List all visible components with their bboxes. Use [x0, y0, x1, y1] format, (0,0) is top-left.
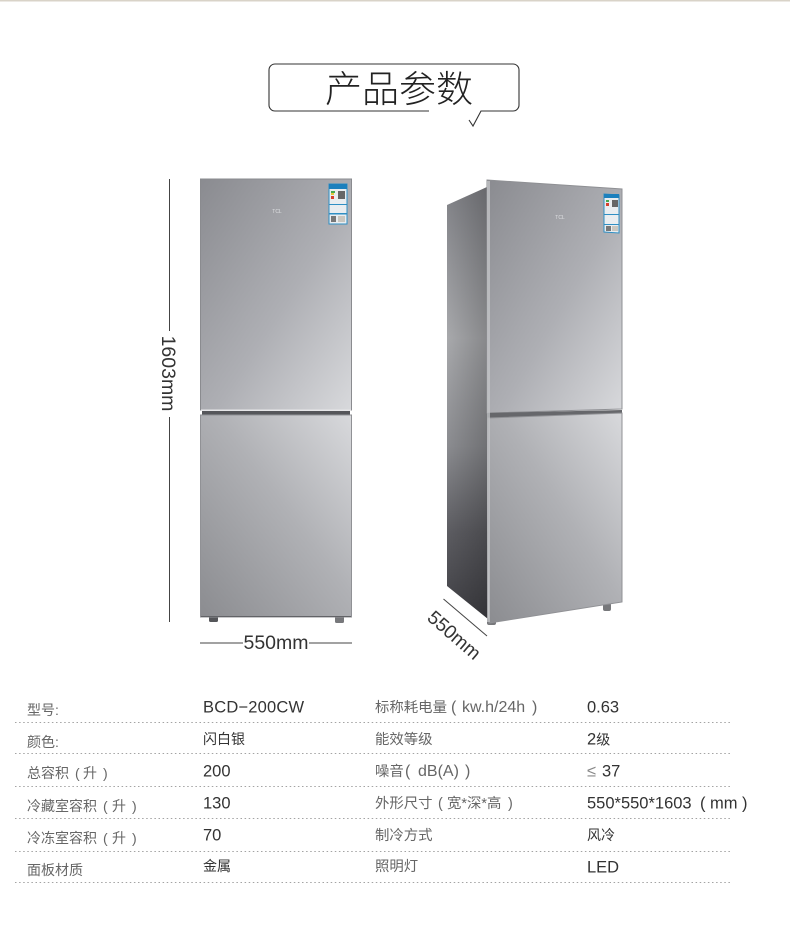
row: fridge volume: 冷藏室容积	[27, 798, 97, 814]
row: fridge volume: mm	[710, 794, 738, 812]
row: model	[27, 698, 619, 718]
row: fridge volume: (	[438, 796, 443, 812]
row: fridge volume: )	[508, 796, 513, 812]
row: total volume: 噪音	[375, 764, 404, 780]
row: total volume: 37	[602, 762, 620, 780]
feet	[209, 616, 218, 622]
row: fridge volume: 升	[112, 798, 126, 814]
lower door	[200, 415, 352, 617]
row: panel material: 面板材质	[27, 862, 83, 878]
row: fridge volume: 宽*深*高	[447, 795, 501, 812]
row: total volume: )	[103, 765, 108, 781]
row: panel material	[27, 858, 619, 878]
row: total volume: ≤	[587, 762, 596, 780]
row: total volume: (	[405, 763, 411, 780]
row: fridge volume: )	[742, 794, 748, 812]
row: freezer volume: (	[103, 830, 108, 846]
title text: 产品参数	[325, 69, 473, 110]
TCL logo: TCL	[272, 209, 282, 215]
lower door	[488, 413, 622, 623]
divider	[487, 410, 622, 419]
row: total volume: 200	[203, 762, 231, 780]
row: fridge volume: (	[700, 794, 706, 812]
row: fridge volume: (	[103, 798, 108, 814]
height dimension: 1603mm: 1603mm	[157, 336, 179, 411]
row: panel material: 照明灯	[375, 858, 418, 875]
row: model: 型号:	[27, 702, 59, 718]
row: freezer volume: 升	[112, 830, 126, 846]
row: model: kw.h/24h	[462, 699, 525, 716]
side panel	[447, 187, 488, 619]
row: panel material: LED	[587, 858, 619, 876]
feet	[487, 618, 496, 625]
TCL logo: TCL	[555, 215, 565, 221]
specification table	[15, 698, 748, 882]
energy label	[329, 184, 347, 224]
title callout	[269, 64, 519, 126]
row: fridge volume: 130	[203, 794, 231, 812]
row: model: 标称耗电量	[375, 700, 447, 716]
row: model: (	[451, 699, 457, 716]
door edge	[487, 181, 490, 622]
row: total volume: )	[465, 763, 470, 780]
upper door	[487, 180, 622, 413]
row: colour: 颜色:	[27, 734, 59, 750]
row: panel material: 金属	[203, 858, 231, 874]
divider	[202, 411, 350, 415]
row: model: BCD−200CW	[203, 698, 305, 716]
row: fridge volume: 550*550*1603	[587, 794, 692, 812]
width dimension: 550mm: 550mm	[243, 632, 309, 654]
row: colour: 闪白银	[203, 731, 245, 747]
row: colour	[27, 730, 610, 750]
row: colour: 能效等级	[375, 730, 433, 748]
perspective-view refrigerator	[447, 180, 622, 625]
upper door	[200, 179, 352, 410]
row: freezer volume: 冷冻室容积	[27, 830, 97, 846]
row: freezer volume: 70	[203, 826, 221, 844]
row: colour: 2级	[587, 730, 610, 748]
row: freezer volume: 制冷方式	[375, 827, 433, 844]
row: freezer volume	[27, 826, 615, 846]
row: model: )	[532, 699, 537, 716]
row: model: 0.63	[587, 698, 619, 716]
row: freezer volume: 风冷	[587, 827, 615, 843]
row: fridge volume	[27, 794, 748, 814]
row: total volume: 总容积	[27, 765, 69, 781]
row: total volume: dB(A)	[418, 763, 459, 780]
row: total volume: 升	[83, 765, 97, 781]
row: total volume: (	[75, 765, 80, 781]
energy label	[604, 194, 619, 233]
depth dimension: 550mm: 550mm	[423, 607, 484, 665]
row: total volume	[27, 762, 620, 781]
row: fridge volume: )	[132, 798, 137, 814]
front-view refrigerator	[200, 179, 352, 623]
row: freezer volume: )	[132, 830, 137, 846]
row: fridge volume: 外形尺寸	[375, 796, 433, 812]
